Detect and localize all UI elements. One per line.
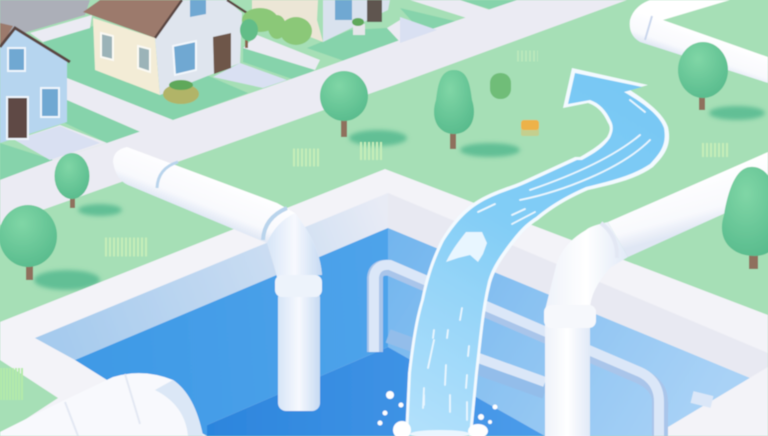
- sidewalk: [0, 0, 627, 225]
- road: [0, 0, 90, 40]
- tree: large left: [0, 205, 100, 290]
- rim left inner face: [35, 193, 388, 360]
- water arrow and waterfall: [405, 68, 669, 436]
- tree: by hedge: [240, 19, 258, 48]
- tree: centre tall: [434, 70, 520, 157]
- left inlet pipe: [113, 147, 322, 411]
- pool rim: [0, 169, 768, 436]
- driveways: [15, 17, 437, 160]
- upper pipe right: [630, 0, 768, 83]
- house right: [252, 0, 390, 42]
- pool right wall: [388, 228, 750, 436]
- tree: top right: [678, 42, 765, 120]
- grass tuft bottom left: [0, 368, 23, 400]
- tree: right edge: [722, 167, 768, 269]
- pool left wall: [75, 228, 388, 436]
- rim side shading right: [388, 193, 768, 378]
- lawn corner bottom left: [0, 360, 58, 436]
- splash: [378, 391, 498, 436]
- yellow block: [521, 120, 539, 136]
- front rim bottom right: [653, 367, 768, 436]
- grass tufts: [105, 56, 730, 247]
- house left: [0, 23, 70, 143]
- hedge row: [242, 8, 312, 45]
- right inlet pipe: [544, 152, 768, 436]
- back wall pipes: [374, 265, 712, 436]
- tree: centre round: [320, 71, 407, 146]
- bottom left pipe: [0, 373, 203, 436]
- tree: small left: [54, 153, 122, 216]
- house centre: [83, 0, 247, 104]
- shrub: [490, 73, 511, 99]
- pool water: [207, 347, 545, 436]
- house lawns: [0, 0, 523, 180]
